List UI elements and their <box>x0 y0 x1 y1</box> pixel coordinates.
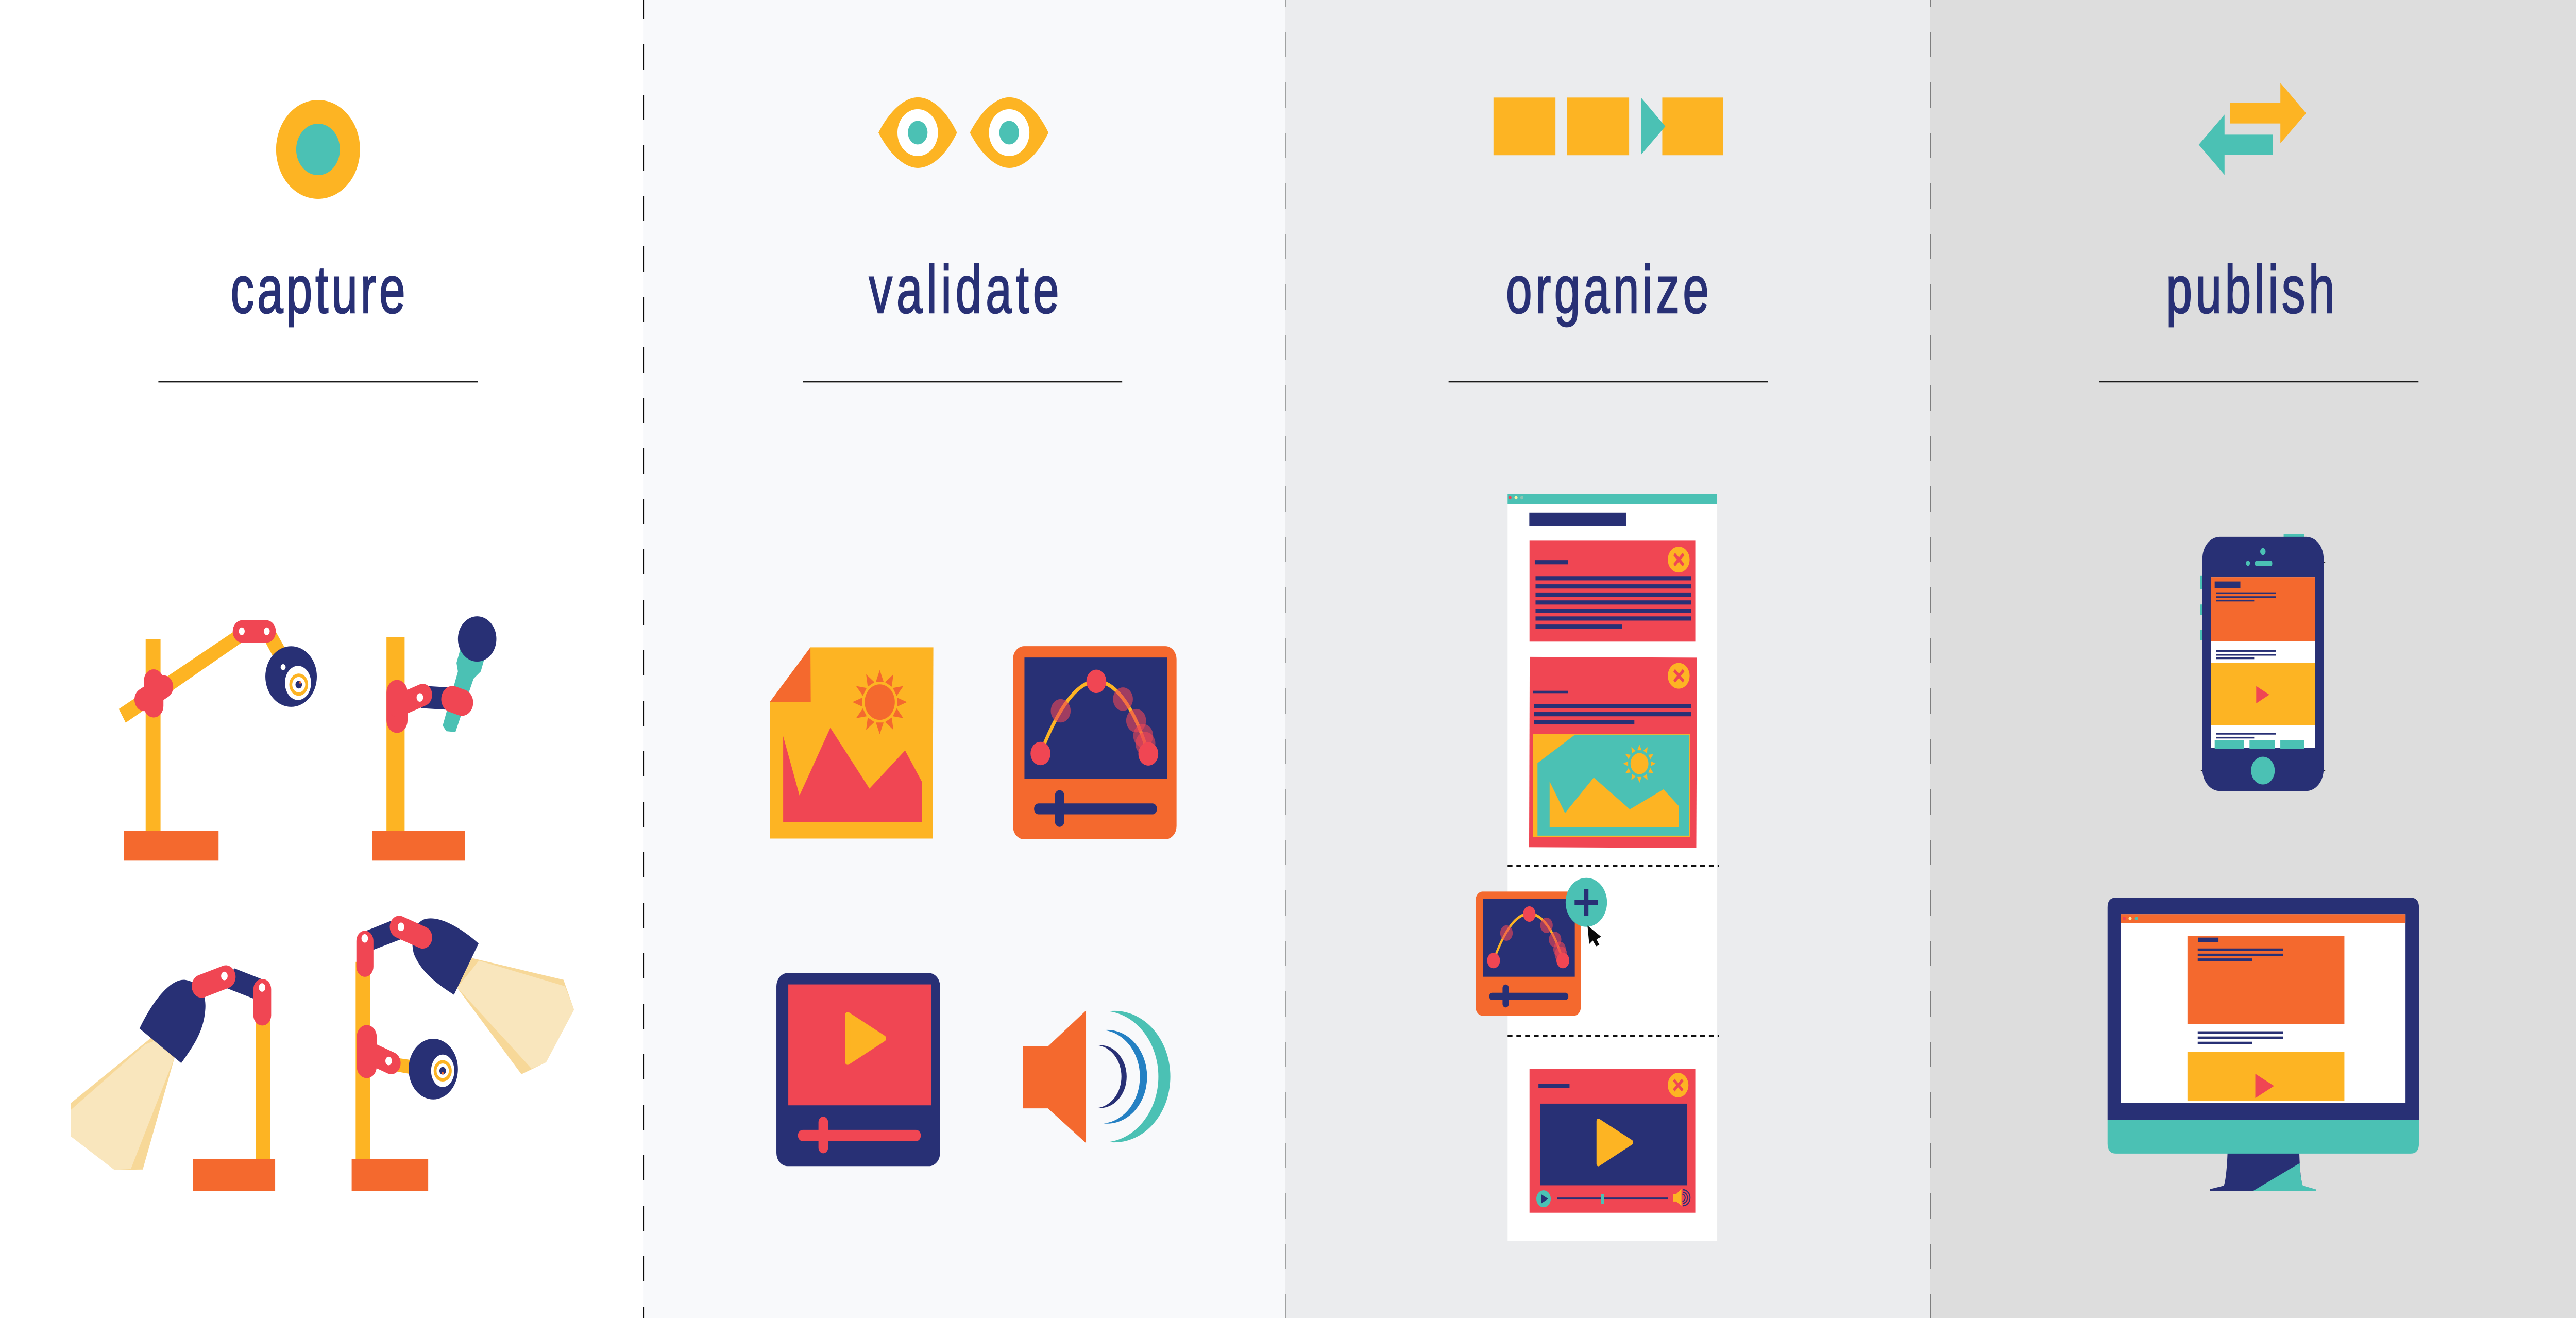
text card <box>1530 540 1696 641</box>
add button <box>1566 878 1607 927</box>
video card <box>1530 1069 1696 1213</box>
icon: phone <box>2200 534 2325 791</box>
heading: capture: capture <box>231 252 405 327</box>
lamp with camera <box>119 620 317 860</box>
lamp with light beam, facing left <box>71 968 275 1191</box>
web page mockup <box>1476 494 1719 1241</box>
heading: validate: validate <box>869 252 1059 327</box>
dragged animation card <box>1476 891 1581 1016</box>
icon: desktop monitor <box>2108 898 2419 1191</box>
cursor <box>1587 925 1601 947</box>
panel: organize <box>1285 0 1930 1318</box>
lamp with light beam and camera, facing right <box>352 918 574 1191</box>
heading: organize: organize <box>1506 252 1709 327</box>
icon: capture eye <box>276 100 360 199</box>
icon: video player <box>776 973 940 1166</box>
image card <box>1529 657 1697 848</box>
icons: media types <box>770 646 1177 1166</box>
icon: animation curve <box>1013 646 1177 839</box>
heading: publish: publish <box>2166 252 2335 327</box>
icon: validate eyes <box>878 97 1048 168</box>
icon: speaker <box>1023 1010 1171 1143</box>
icon: image file <box>770 647 934 838</box>
lamp with microphone <box>372 616 496 860</box>
icon: organize timeline <box>1494 97 1723 155</box>
browser bar <box>1507 494 1717 504</box>
icon: lamp stands <box>71 616 574 1191</box>
dashed dividers <box>643 0 1930 1318</box>
panel: publish <box>1930 0 2576 1318</box>
icon: publish arrows <box>2199 83 2306 175</box>
panel: capture <box>0 0 643 1318</box>
panel: validate <box>643 0 1285 1318</box>
